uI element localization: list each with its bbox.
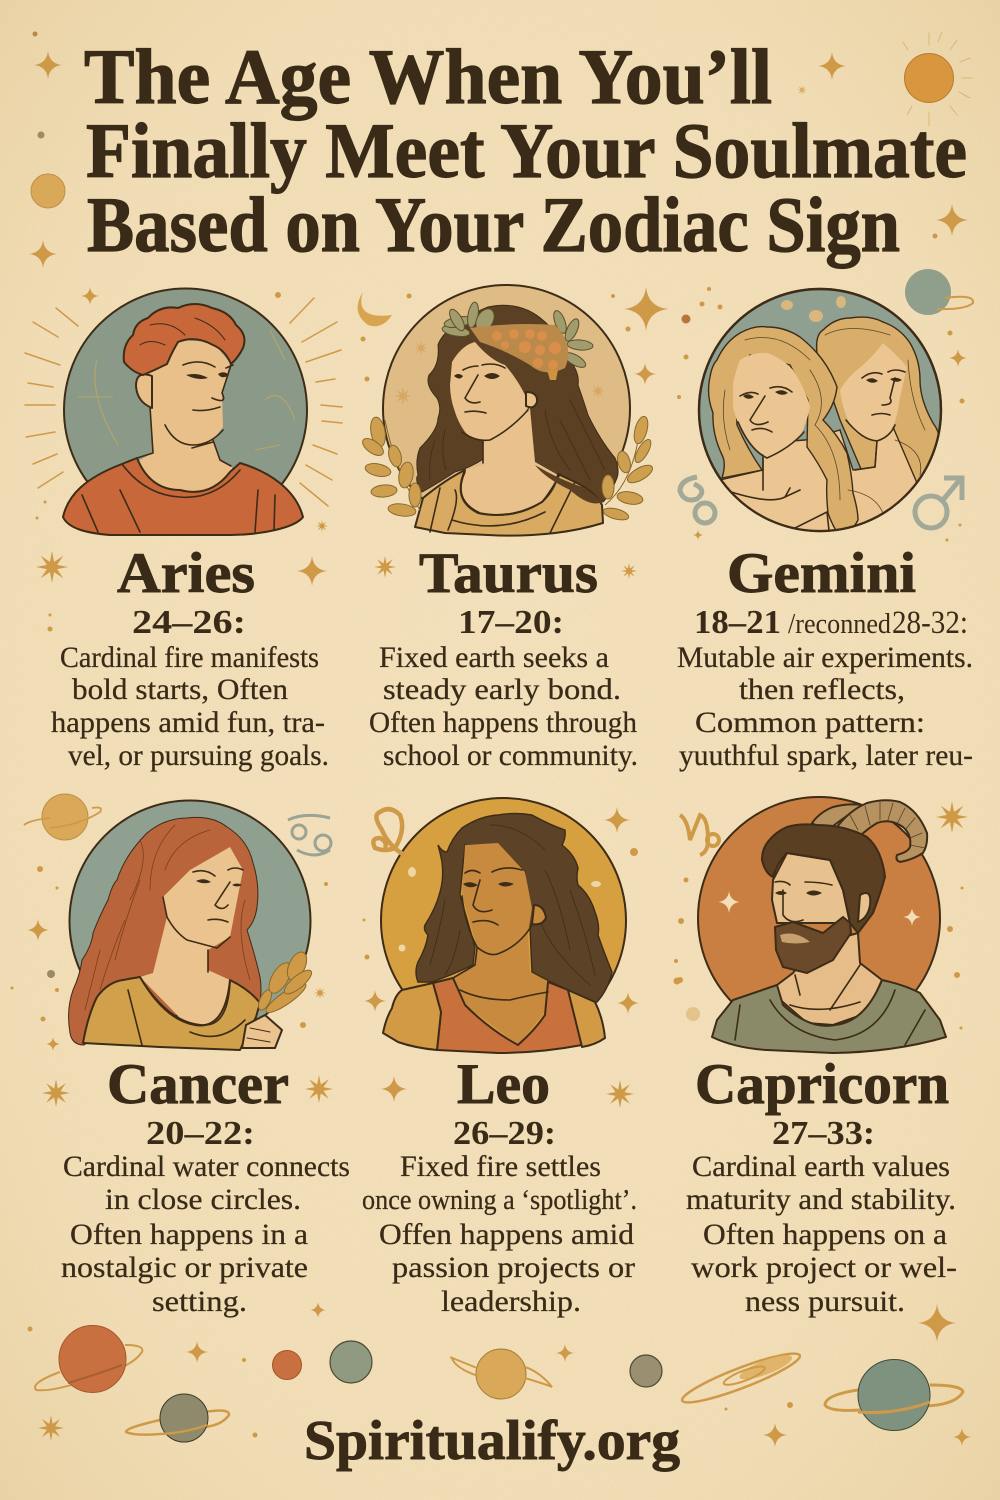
title (84, 33, 967, 268)
panel: Capricorn (674, 797, 968, 1342)
age: Gemini: 18–21 (694, 604, 781, 641)
age: Gemini (694, 604, 968, 641)
sparkles around Aries (36, 287, 328, 632)
hair (417, 305, 618, 502)
heading: Leo: Leo (457, 1053, 550, 1116)
description: Leo: passion projects or (392, 1251, 635, 1284)
portrait: Capricorn (698, 797, 946, 1053)
heading: Aries: Aries (117, 542, 255, 605)
sparkles around Taurus (360, 287, 668, 579)
neck and chest (140, 847, 243, 1028)
description: Leo: Fixed fire settles (400, 1150, 601, 1183)
left twin hair (709, 327, 858, 537)
planet: small orange (272, 1350, 302, 1380)
planet: orange (35, 1326, 142, 1392)
portrait: Cancer (69, 800, 315, 1050)
top (433, 978, 582, 1053)
planet: gold (451, 1349, 552, 1399)
title: Finally Meet Your Soulmate (86, 107, 967, 194)
icon: leo symbol (373, 809, 404, 855)
description: Taurus: school or community. (383, 739, 638, 772)
sparkles around Capricorn (674, 801, 968, 1342)
description: Capricorn: maturity and stability. (686, 1183, 956, 1216)
shoulders (383, 983, 441, 1050)
description: Cancer: Cardinal water connects (63, 1150, 350, 1183)
icon: capricorn symbol (680, 815, 719, 855)
planets row (28, 1302, 971, 1447)
description: Capricorn: Often happens on a (703, 1218, 947, 1251)
description: Taurus (369, 641, 638, 772)
description: Aries: vel, or pursuing goals. (68, 739, 329, 772)
panel: Aries (25, 287, 342, 772)
icon: crescent moon (358, 292, 392, 326)
description: Aries (51, 641, 329, 772)
wreath (441, 301, 593, 380)
shirt (63, 458, 303, 535)
planet: ring streak (679, 1346, 803, 1410)
description: Aries: Cardinal fire manifests (60, 641, 319, 674)
hair (69, 817, 261, 1045)
icon: cancer symbol (288, 815, 331, 855)
right twin hair (817, 317, 939, 490)
description: Capricorn: ness pursuit. (745, 1285, 905, 1318)
panel: Gemini (677, 269, 973, 772)
description: Leo: leadership. (441, 1285, 581, 1318)
hand (242, 1015, 282, 1048)
sparkles around Cancer (10, 866, 366, 1107)
sparkles around Leo (364, 807, 683, 1108)
age: Gemini: /reconned (788, 609, 891, 640)
ear (526, 392, 537, 407)
panel: Leo (362, 798, 683, 1318)
sparkles around Gemini (677, 287, 967, 542)
portrait: Taurus (383, 285, 630, 536)
description: Gemini: yuuthful spark, later reu- (679, 739, 973, 772)
description: Cancer: setting. (152, 1285, 247, 1318)
description: Leo: Offen happens amid (379, 1218, 634, 1251)
age: Cancer: 20–22: (146, 1115, 255, 1152)
description: Taurus: steady early bond. (383, 673, 621, 706)
planet: taupe (630, 1355, 662, 1387)
age: Taurus: 17–20: (458, 604, 564, 641)
description: Capricorn (686, 1150, 957, 1318)
description: Gemini: Mutable air experiments. (677, 641, 973, 674)
neck (458, 408, 558, 514)
small stars (28, 1302, 971, 1447)
dress (83, 977, 260, 1050)
age: Capricorn: 27–33: (772, 1115, 875, 1152)
description: Aries: bold starts, Often (72, 673, 288, 706)
description: Gemini: Common pattern: (695, 706, 925, 739)
panel: Cancer (10, 794, 366, 1318)
face (450, 342, 528, 440)
portrait: Gemini (699, 289, 941, 560)
age: Aries: 24–26: (132, 604, 246, 641)
description: Taurus: Often happens through (369, 706, 637, 739)
wheat (256, 949, 315, 1017)
portrait: Leo (381, 798, 626, 1053)
age: Leo: 26–29: (453, 1115, 556, 1152)
description: Gemini (677, 641, 973, 772)
icon: sun (903, 32, 972, 126)
planet: slate (330, 1341, 372, 1383)
description: Aries: happens amid fun, tra- (51, 706, 325, 739)
laurel left (360, 416, 421, 518)
dress (415, 470, 603, 536)
age: Gemini: 28-32: (892, 605, 968, 641)
description: Cancer: nostalgic or private (61, 1251, 308, 1284)
panel: Taurus (358, 285, 668, 772)
hair (124, 304, 244, 375)
portrait: Aries (25, 288, 342, 535)
description: Cancer (61, 1150, 350, 1318)
shoulders skin (722, 426, 917, 530)
heading: Capricorn: Capricorn (695, 1053, 949, 1116)
description: Gemini: then reflects, (739, 673, 905, 706)
hair (416, 814, 612, 1002)
description: Cancer: Often happens in a (70, 1218, 308, 1251)
heading: Taurus: Taurus (419, 542, 598, 605)
heading: Cancer: Cancer (107, 1053, 289, 1116)
icon: mars symbol (915, 477, 962, 528)
title: Based on Your Zodiac Sign (87, 181, 900, 268)
planet top right (905, 269, 973, 315)
description: Cancer: in close circles. (105, 1183, 301, 1216)
footer: website: Spiritualify.org (304, 1410, 680, 1472)
planet: gray-brown (126, 1394, 229, 1442)
description: Leo: once owning a ‘spotlight’. (362, 1184, 637, 1216)
planet (24, 794, 101, 840)
icon: gemini glyph (680, 477, 715, 523)
face and neck (453, 843, 548, 1045)
ear (136, 374, 152, 408)
neck and face (128, 340, 232, 500)
description: Taurus: Fixed earth seeks a (379, 641, 609, 674)
heading: Gemini: Gemini (727, 542, 916, 605)
description: Capricorn: Cardinal earth values (692, 1150, 950, 1183)
planet: large slate (825, 1360, 963, 1430)
laurel right (602, 415, 655, 522)
description: Leo (362, 1150, 637, 1318)
left twin face (733, 353, 810, 457)
decorative stars and dots top (29, 32, 968, 268)
title: The Age When You’ll (84, 33, 772, 120)
right twin face (840, 343, 907, 440)
description: Capricorn: work project or wel- (691, 1251, 957, 1284)
